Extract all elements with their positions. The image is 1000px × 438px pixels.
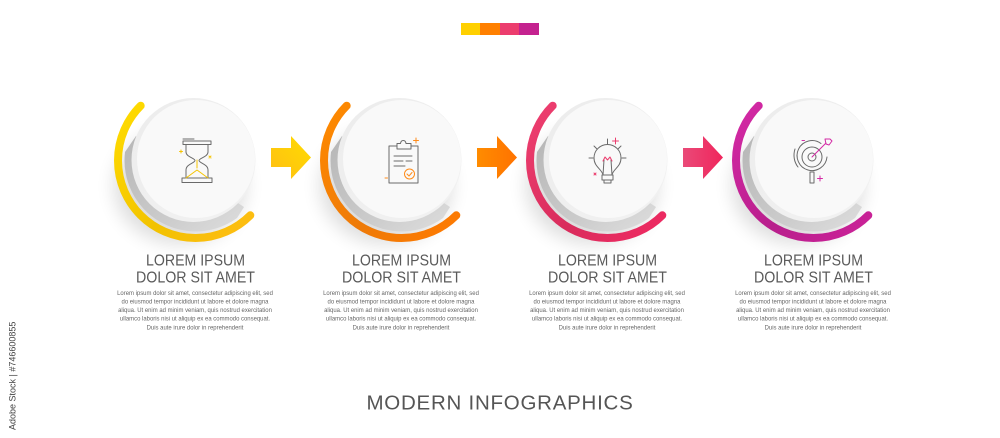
step 3 [526,98,685,331]
step 4 body text: do eiusmod tempor incididunt ut labore et dolore magna [740,299,887,305]
step 1 heading [136,252,255,286]
step 3 body text: aliqua. Ut enim ad minim veniam, quis nostrud exercitation [530,308,684,314]
step 3 body text: ullamco laboris nisi ut aliquip ex ea commodo consequat. [532,317,682,323]
step 1 circle [114,98,256,244]
step 1 body text: ullamco laboris nisi ut aliquip ex ea commodo consequat. [120,317,270,323]
step 1 [114,98,273,331]
step 2 body text: do eiusmod tempor incididunt ut labore et dolore magna [328,299,475,305]
icon: target with arrow [794,139,832,183]
step 3 circle [526,98,668,244]
step 2 body text: Lorem ipsum dolor sit amet, consectetur adipiscing elit, sed [323,291,479,297]
step 2 body text: aliqua. Ut enim ad minim veniam, quis nostrud exercitation [324,308,478,314]
side stock label: Adobe Stock | #746600855 [8,322,18,430]
step 3 heading: LOREM IPSUM [558,252,657,270]
step 4 heading: DOLOR SIT AMET [754,270,873,286]
step 3 heading: DOLOR SIT AMET [548,270,667,286]
step 1 heading: LOREM IPSUM [146,252,245,270]
icon: clipboard [385,138,418,183]
icon: hourglass [180,139,212,182]
arrow 2 [477,136,517,179]
step 2 heading: LOREM IPSUM [352,252,451,270]
arrow 1 [271,136,311,179]
step 3 body text: do eiusmod tempor incididunt ut labore et dolore magna [534,299,681,305]
step 4 body text: aliqua. Ut enim ad minim veniam, quis nostrud exercitation [736,308,890,314]
title: MODERN INFOGRAPHICS [366,391,634,414]
step 2 heading: DOLOR SIT AMET [342,270,461,286]
step 3 body text: Duis aute irure dolor in reprehenderit [559,325,656,331]
icon: light bulb [589,138,626,183]
step 1 heading: DOLOR SIT AMET [136,270,255,286]
step 4 body text: ullamco laboris nisi ut aliquip ex ea commodo consequat. [738,317,888,323]
step 2 body text: ullamco laboris nisi ut aliquip ex ea commodo consequat. [326,317,476,323]
step 3 body text: Lorem ipsum dolor sit amet, consectetur adipiscing elit, sed [529,291,685,297]
arrow 3 [683,136,723,179]
step 2 [320,98,479,331]
step 4 body text: Lorem ipsum dolor sit amet, consectetur adipiscing elit, sed [735,291,891,297]
colour bar [461,23,539,35]
step 4 [732,98,891,331]
step 1 body text: Lorem ipsum dolor sit amet, consectetur adipiscing elit, sed [117,291,273,297]
step 1 body text: Duis aute irure dolor in reprehenderit [147,325,244,331]
step 2 circle [320,98,462,244]
step 4 heading: LOREM IPSUM [764,252,863,270]
step 1 body text: aliqua. Ut enim ad minim veniam, quis nostrud exercitation [118,308,272,314]
step 1 body text: do eiusmod tempor incididunt ut labore et dolore magna [122,299,269,305]
step 3 heading [548,252,667,286]
step 4 circle [732,98,874,244]
step 4 body text: Duis aute irure dolor in reprehenderit [765,325,862,331]
step 2 heading [342,252,461,286]
step 2 body text: Duis aute irure dolor in reprehenderit [353,325,450,331]
step 4 heading [754,252,873,286]
